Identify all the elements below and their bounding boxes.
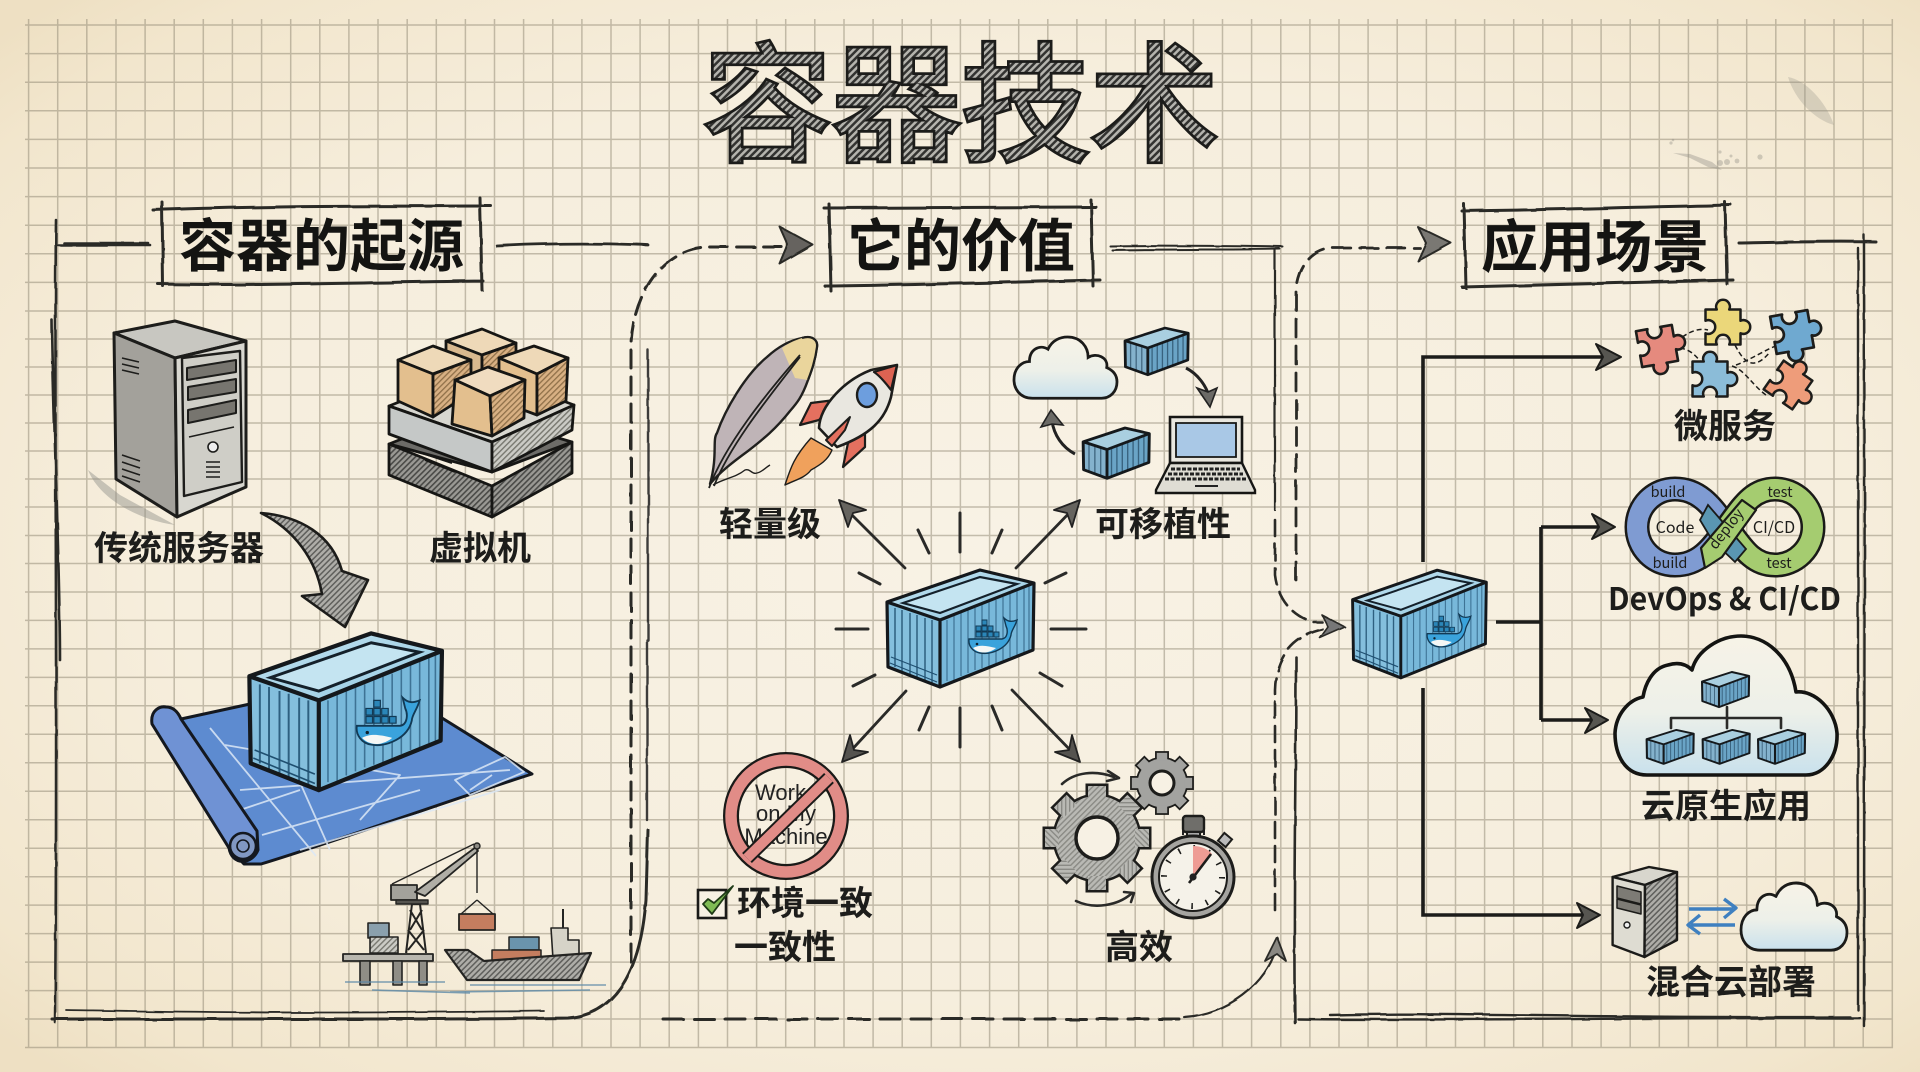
label: devops and ci/cd: DevOps & CI/CD [1608,574,1841,619]
arrow: to microservices [1423,344,1621,562]
arrow: to efficiency [1012,690,1080,762]
icon: cloud native [1615,636,1837,775]
center container with rays [836,513,1086,747]
icon: no works on my machine sign: Machine [744,824,828,849]
icon: devops infinity loop: Code [1656,514,1694,538]
label: portability: 可移植性 [1095,497,1231,546]
label: microservices: 微服务 [1674,399,1776,448]
arrow: to hybrid cloud [1423,688,1600,928]
icon: devops infinity loop: test [1767,481,1793,502]
arrow: to consistency [842,691,906,762]
panel frame: container origin [52,220,648,1022]
arrow: to portability [1016,500,1080,568]
arrow: evolution to container [261,513,368,627]
label: cloud native apps: 云原生应用 [1641,779,1811,828]
icon: checkbox [698,886,733,918]
icon: rocket [785,365,897,485]
icon: portability cycle [1014,328,1255,493]
icon: devops infinity loop: test [1766,552,1792,573]
right container [1353,570,1486,678]
icon: no works on my machine sign: Works [755,780,817,805]
icon: traditional server [88,321,246,525]
title: 容器技术 [703,2,1219,189]
icon: feather [709,337,817,488]
heading: its value: 它的价值 [847,201,1075,283]
panel frame: value [663,246,1345,1019]
panel frame: scenarios [1294,235,1876,1026]
icon: devops infinity loop: build [1653,552,1687,573]
arrow: to devops and cloud native [1496,514,1615,733]
heading: container origin: 容器的起源 [179,201,464,283]
dashed flow: value to scenarios [1296,227,1451,580]
icon: microservice puzzle pieces [1636,300,1826,415]
icon: devops infinity loop: CI/CD [1753,514,1795,538]
paper smudges [1669,77,1834,170]
icon: blueprint [152,704,532,864]
icon: no works on my machine sign [731,760,841,872]
label: environment consistent: 环境一致 [737,876,873,925]
arrow: to lightweight [839,500,905,568]
label: virtual machine: 虚拟机 [429,521,531,570]
icon: virtual machine stack [389,329,574,517]
icon: port with crane and ship [343,843,606,993]
icon: no works on my machine sign: on My [756,801,816,826]
dashed flow: origin to value [631,227,813,962]
icon: devops infinity loop [1637,481,1813,573]
icon: main container with whale [249,633,442,790]
icon: devops infinity loop: deploy [1703,504,1748,553]
label: hybrid cloud deployment: 混合云部署 [1646,955,1816,1004]
label: consistency: 一致性 [734,920,836,969]
icon: hybrid cloud [1613,867,1847,957]
heading: application scenarios: 应用场景 [1481,202,1709,284]
icon: gears and stopwatch [1045,753,1234,918]
icon: devops infinity loop: build [1651,481,1685,502]
label: traditional server: 传统服务器 [94,521,264,570]
label: efficient: 高效 [1105,920,1173,969]
label: lightweight: 轻量级 [719,497,821,546]
